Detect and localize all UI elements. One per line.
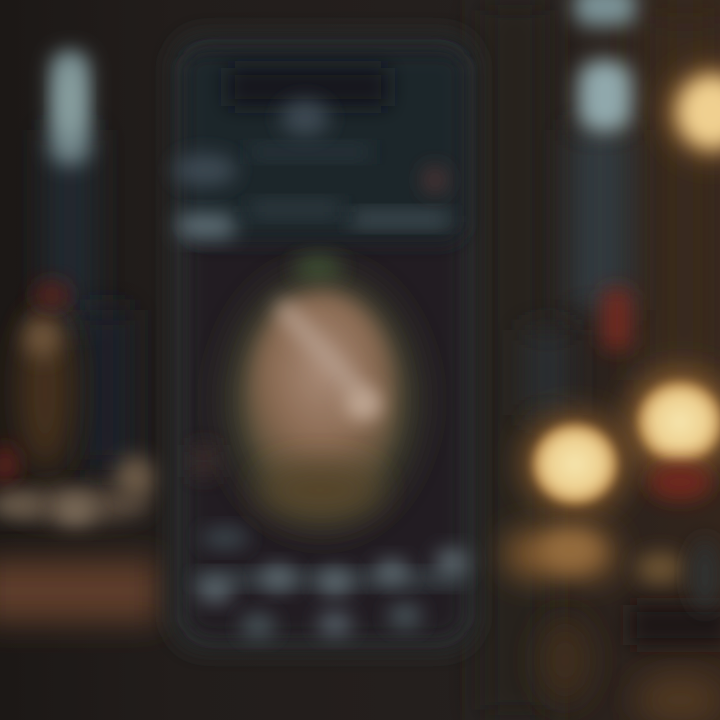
smartphone body — [170, 32, 478, 652]
bokeh light: right large — [628, 370, 720, 500]
bokeh light: center right — [523, 414, 627, 514]
phone screen top panel — [173, 52, 464, 242]
warm table reflections — [505, 530, 720, 720]
bokeh light: top right — [668, 68, 720, 156]
right window column — [525, 0, 636, 415]
phone bottom icon rows — [195, 528, 469, 638]
left window column — [45, 50, 130, 470]
left wooden table glow — [0, 560, 160, 622]
phone screen illustration with egg shape — [192, 256, 422, 530]
left figure and table objects — [0, 281, 155, 525]
